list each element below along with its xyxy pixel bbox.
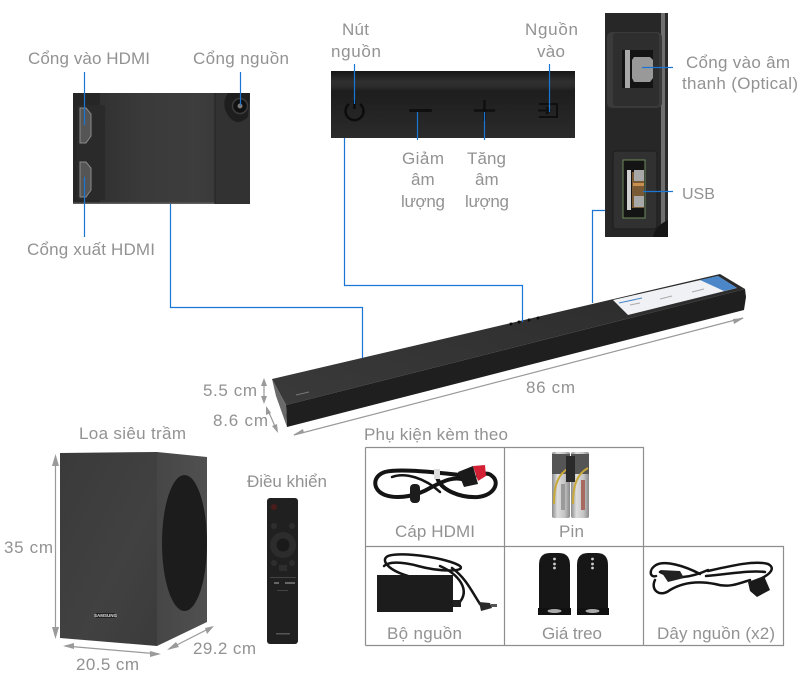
accessory: HDMI cable xyxy=(375,465,496,503)
right bracket xyxy=(577,553,609,615)
callout line: HDMI in xyxy=(84,72,86,125)
remote d-pad xyxy=(270,532,296,558)
label: length: 86 cm xyxy=(526,378,575,397)
icon: power socket xyxy=(224,93,250,122)
heading: remote: Điều khiển xyxy=(247,472,327,491)
label: power socket: Cổng nguồn xyxy=(193,49,289,68)
label: optical xyxy=(682,53,798,93)
label: subwoofer depth: 29.2 cm xyxy=(193,639,256,658)
label: volume up: âm xyxy=(475,170,499,189)
panel: side ports photo xyxy=(605,13,668,237)
dimension: subwoofer width xyxy=(63,643,161,657)
left bracket xyxy=(538,553,571,615)
icon: input source xyxy=(538,104,557,117)
label: USB: USB xyxy=(682,186,715,203)
icon: USB port xyxy=(623,160,645,218)
soundbar info sticker xyxy=(613,276,737,315)
label: volume down: Giảm xyxy=(402,149,444,168)
label: volume up: lượng xyxy=(465,192,509,211)
dimension: subwoofer depth xyxy=(167,626,214,650)
callout line: power button xyxy=(354,64,356,104)
callout line: power socket xyxy=(240,72,242,105)
label: HDMI out: Cổng xuất HDMI xyxy=(27,240,155,259)
label: volume down: âm xyxy=(411,170,435,189)
callout line: side panel to soundbar xyxy=(592,210,605,303)
label: optical: thanh (Optical) xyxy=(682,74,798,93)
panel: top controls photo xyxy=(331,71,575,138)
label: input source: Nguồn xyxy=(525,20,578,39)
label: volume down: lượng xyxy=(401,192,445,211)
accessory: batteries xyxy=(552,452,589,518)
accessory label: power cord: Dây nguồn (x2) xyxy=(657,624,775,643)
accessory: power adapter xyxy=(377,554,497,612)
icon: HDMI in port xyxy=(80,108,91,143)
label: volume down xyxy=(401,149,445,211)
label: subwoofer width: 20.5 cm xyxy=(76,655,139,674)
icon: HDMI out port xyxy=(80,162,91,197)
callout line: optical xyxy=(642,66,673,68)
accessory label: power adapter: Bộ nguồn xyxy=(387,624,462,643)
label: input source: vào xyxy=(537,42,565,61)
label: HDMI in: Cổng vào HDMI xyxy=(28,49,150,68)
callout line: USB xyxy=(643,190,673,192)
label: volume up: Tăng xyxy=(467,149,506,168)
accessory: power cord xyxy=(651,563,772,597)
callout line: HDMI out xyxy=(84,177,86,237)
label: height: 5.5 cm xyxy=(203,381,257,400)
icon: power button xyxy=(346,100,364,120)
soundbar top buttons xyxy=(510,316,540,326)
accessory: wall brackets xyxy=(538,553,609,615)
label: subwoofer height: 35 cm xyxy=(4,538,53,557)
subwoofer logo: SAMSUNG xyxy=(94,613,117,618)
callout line: volume up xyxy=(484,112,486,140)
label: depth: 8.6 cm xyxy=(213,411,268,430)
remote power button xyxy=(271,504,277,510)
soundbar xyxy=(272,274,746,427)
subwoofer xyxy=(60,452,207,646)
remote control xyxy=(267,498,298,644)
accessory label: wall brackets: Giá treo xyxy=(542,624,602,643)
subwoofer driver xyxy=(162,475,207,611)
label: power button: Nút xyxy=(342,20,369,39)
callout line: top panel to soundbar xyxy=(344,138,522,322)
callout line: volume down xyxy=(416,112,418,140)
accessories table grid xyxy=(366,448,784,646)
heading: subwoofer: Loa siêu trầm xyxy=(79,424,186,443)
icon: volume minus xyxy=(409,109,432,112)
heading: accessories: Phụ kiện kèm theo xyxy=(364,425,508,444)
label: input source xyxy=(525,20,578,61)
label: power button: nguồn xyxy=(331,42,381,61)
label: optical: Cổng vào âm xyxy=(686,53,790,72)
icon: optical port xyxy=(622,50,653,88)
dimension: depth arrow xyxy=(266,406,278,433)
icon: volume plus xyxy=(474,100,495,121)
callout line: input source xyxy=(548,64,550,112)
label: power button xyxy=(331,20,381,61)
panel: rear ports photo xyxy=(73,93,250,204)
label: volume up xyxy=(465,149,509,211)
accessory label: HDMI cable: Cáp HDMI xyxy=(395,522,475,541)
callout line: rear panel to soundbar xyxy=(170,204,362,358)
dimension: length arrow xyxy=(293,318,744,435)
accessory label: batteries: Pin xyxy=(559,522,584,541)
dimension: subwoofer height xyxy=(52,454,59,639)
dimension: height arrow xyxy=(261,378,267,404)
